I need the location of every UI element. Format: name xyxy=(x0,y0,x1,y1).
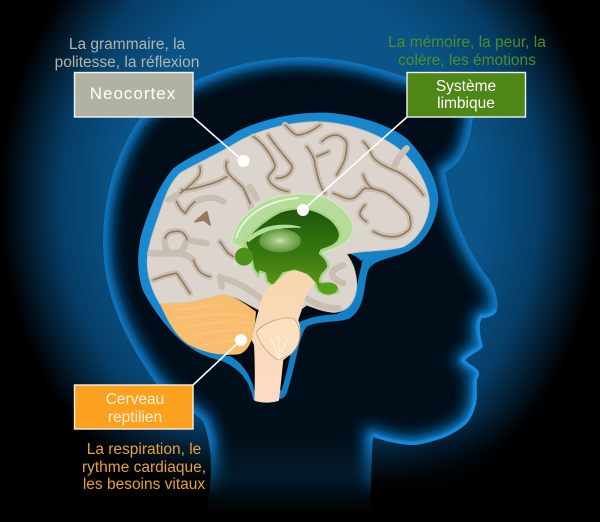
text: neocortex functions: La grammaire, la xyxy=(69,36,186,53)
text: reptilian functions xyxy=(82,441,206,493)
box: reptilian brain: reptilien xyxy=(108,409,162,426)
brainstem xyxy=(252,271,315,403)
pointer: neocortex xyxy=(193,117,250,167)
box: reptilian brain: Cerveau xyxy=(106,391,164,408)
limbic system xyxy=(232,194,353,295)
shadow behind brain xyxy=(173,253,363,393)
text: limbic functions xyxy=(388,34,546,69)
sulci soft shading xyxy=(150,125,423,308)
cerebellum xyxy=(160,295,256,355)
box: neocortex xyxy=(74,72,193,117)
text: limbic functions: La mémoire, la peur, la xyxy=(388,34,546,51)
box: limbic system: limbique xyxy=(437,95,495,112)
pointer: reptilian brain xyxy=(193,334,247,385)
box: limbic system xyxy=(407,72,526,117)
sulci dark core xyxy=(153,125,423,293)
limbic core xyxy=(245,208,340,295)
box: reptilian brain xyxy=(74,385,193,429)
text: reptilian functions: rythme cardiaque, xyxy=(82,459,206,476)
pointer: limbic system xyxy=(297,117,407,216)
brain illustration xyxy=(138,113,438,403)
text: neocortex functions xyxy=(55,36,199,71)
blue halo around brain xyxy=(138,113,438,400)
text: reptilian functions: les besoins vitaux xyxy=(83,476,205,493)
cortex xyxy=(147,122,429,312)
text: neocortex functions: politesse, la réflexion xyxy=(55,54,199,71)
pons xyxy=(256,318,300,360)
head silhouette xyxy=(103,57,498,522)
text: limbic functions: colère, les émotions xyxy=(398,52,536,69)
box: neocortex: Neocortex xyxy=(90,84,176,103)
text: reptilian functions: La respiration, le xyxy=(87,441,201,458)
box: limbic system: Système xyxy=(436,78,496,95)
